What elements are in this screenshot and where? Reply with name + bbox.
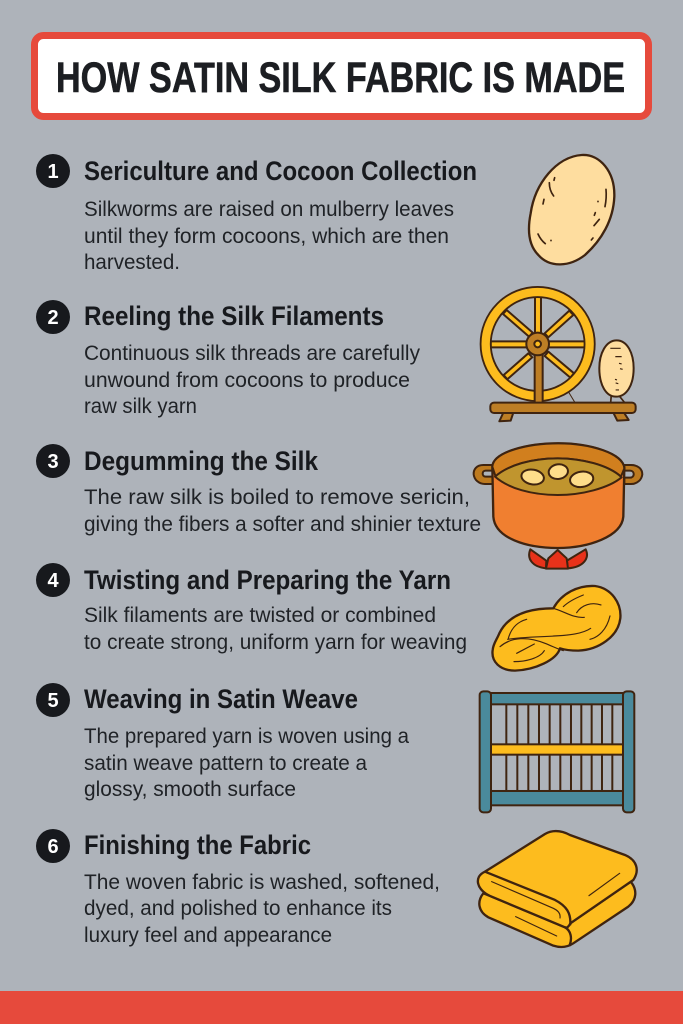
description 5 — [84, 725, 409, 801]
description 6 — [84, 871, 440, 947]
step 5: weaving — [36, 683, 409, 801]
number badge 4 — [36, 563, 70, 597]
heading 5: Weaving in Satin Weave — [84, 684, 358, 714]
heading 2: Reeling the Silk Filaments — [84, 301, 384, 331]
description 4: to create strong, uniform yarn for weaving — [84, 631, 467, 654]
icon: spinning wheel — [486, 292, 636, 421]
description 6: dyed, and polished to enhance its — [84, 897, 392, 920]
description 6: The woven fabric is washed, softened, — [84, 871, 440, 894]
description 5: glossy, smooth surface — [84, 778, 296, 801]
description 1: Silkworms are raised on mulberry leaves — [84, 198, 454, 221]
icon: twisted yarn skein — [492, 586, 620, 671]
number badge 1: 1 — [47, 161, 59, 183]
title — [34, 36, 648, 116]
heading 6: Finishing the Fabric — [84, 830, 311, 860]
number badge 2: 2 — [47, 307, 59, 329]
icon: cocoon — [529, 155, 614, 264]
description 6: luxury feel and appearance — [84, 924, 332, 947]
number badge 5 — [36, 683, 70, 717]
description 4: Silk filaments are twisted or combined — [84, 604, 436, 627]
step 4: twisting — [36, 563, 467, 654]
number badge 6: 6 — [47, 836, 59, 858]
heading 3: Degumming the Silk — [84, 446, 319, 476]
number badge 3 — [36, 444, 70, 478]
footer bar — [0, 991, 683, 1024]
description 4 — [84, 604, 467, 654]
description 2 — [84, 342, 420, 418]
step 6: finishing — [36, 829, 440, 947]
number badge 6 — [36, 829, 70, 863]
description 1 — [84, 198, 454, 274]
description 3 — [84, 486, 481, 536]
description 1: until they form cocoons, which are then — [84, 225, 449, 248]
heading 1: Sericulture and Cocoon Collection — [84, 156, 477, 186]
description 5: The prepared yarn is woven using a — [84, 725, 409, 748]
step 3: degumming — [36, 444, 481, 536]
step 1: sericulture — [36, 154, 477, 274]
description 5: satin weave pattern to create a — [84, 752, 367, 775]
heading 4: Twisting and Preparing the Yarn — [84, 565, 451, 595]
description 3: The raw silk is boiled to remove sericin, — [84, 486, 470, 509]
number badge 4: 4 — [47, 570, 59, 592]
icon: folded fabric — [478, 831, 637, 947]
description 1: harvested. — [84, 251, 180, 274]
description 2: Continuous silk threads are carefully — [84, 342, 420, 365]
description 2: unwound from cocoons to produce — [84, 369, 410, 392]
description 3: giving the fibers a softer and shinier texture — [84, 513, 481, 536]
number badge 1 — [36, 154, 70, 188]
icon: boiling pot — [474, 443, 642, 569]
number badge 5: 5 — [47, 690, 59, 712]
number badge 3: 3 — [47, 451, 59, 473]
icon: weaving loom — [480, 691, 634, 812]
description 2: raw silk yarn — [84, 395, 197, 418]
number badge 2 — [36, 300, 70, 334]
step 2: reeling — [36, 300, 420, 418]
